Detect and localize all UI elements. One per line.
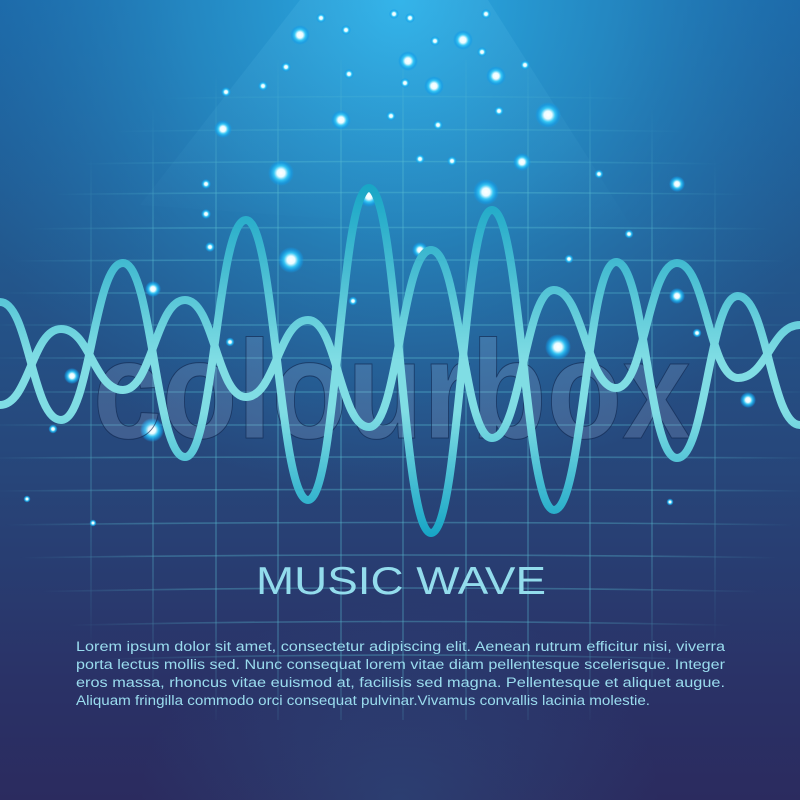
medium stars bbox=[64, 25, 756, 408]
body text bbox=[76, 639, 726, 708]
wave A bbox=[0, 188, 800, 533]
light beam bbox=[140, 0, 640, 240]
body text: porta lectus mollis sed. Nunc consequat lorem vitae diam pellentesque scelerisque. Integer bbox=[76, 657, 726, 672]
sound waves bbox=[0, 188, 800, 533]
body text: Lorem ipsum dolor sit amet, consectetur adipiscing elit. Aenean rutrum efficitur nisi, viverra bbox=[76, 639, 726, 654]
small stars bbox=[24, 9, 702, 526]
title: MUSIC WAVE bbox=[256, 560, 546, 603]
body text: Aliquam fringilla commodo orci consequat pulvinar.Vivamus convallis lacinia molestie. bbox=[76, 693, 650, 708]
stars bbox=[24, 9, 756, 526]
body text: eros massa, rhoncus vitae euismod at, facilisis sed magna. Pellentesque et aliquet augue. bbox=[76, 675, 725, 690]
wave B bbox=[0, 250, 800, 438]
large stars bbox=[140, 102, 571, 442]
watermark: colourbox bbox=[93, 311, 691, 468]
